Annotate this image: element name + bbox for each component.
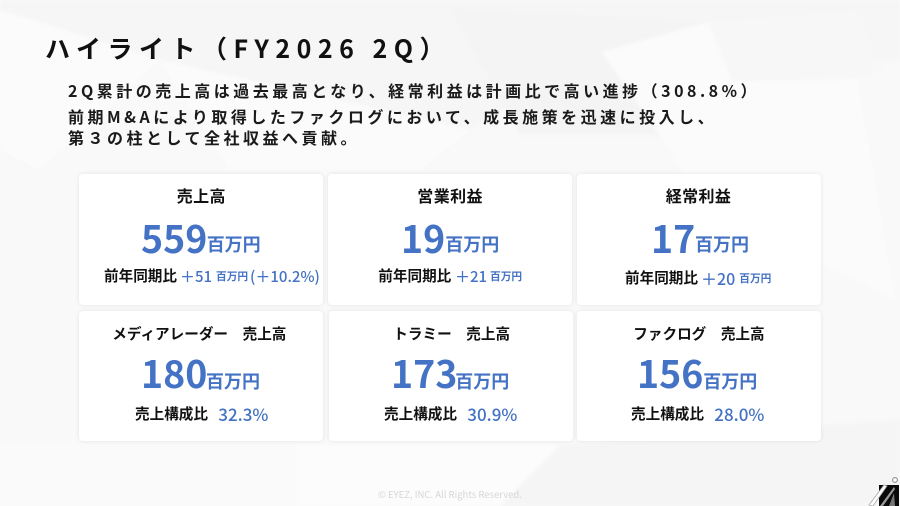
comparison value: ＋51 bbox=[180, 266, 212, 287]
comparison unit: 百万円 bbox=[216, 269, 248, 284]
panel: 経常利益 bbox=[577, 174, 821, 305]
share value: 28.0% bbox=[714, 401, 764, 426]
share label: 売上構成比 bbox=[384, 403, 457, 424]
comparison unit: 百万円 bbox=[490, 269, 522, 284]
icon: logo bbox=[868, 477, 899, 506]
card heading: 経常利益 bbox=[666, 183, 731, 207]
unit: 百万円 bbox=[445, 231, 499, 257]
comparison value: ＋20 bbox=[701, 266, 735, 290]
summary line 1: 2Q累計の売上高は過去最高となり、経常利益は計画比で高い進捗（308.8%） bbox=[68, 78, 760, 102]
summary line 2: 前期M&Aにより取得したファクログにおいて、成長施策を迅速に投入し、 bbox=[68, 104, 717, 128]
comparison label: 前年同期比 bbox=[378, 265, 451, 286]
unit: 百万円 bbox=[455, 368, 509, 394]
card heading: 売上高 bbox=[177, 183, 226, 207]
share value: 32.3% bbox=[218, 401, 268, 426]
unit: 百万円 bbox=[206, 368, 260, 394]
panel: 売上高 bbox=[79, 174, 323, 305]
panel: ファクログ 売上高 bbox=[577, 311, 821, 441]
comparison label: 前年同期比 bbox=[104, 265, 177, 286]
big number: 559 bbox=[141, 209, 207, 264]
big number: 156 bbox=[637, 344, 703, 399]
share value: 30.9% bbox=[467, 401, 517, 426]
unit: 百万円 bbox=[695, 231, 749, 257]
big number: 17 bbox=[651, 209, 695, 264]
title: ハイライト（FY2026 2Q） bbox=[45, 30, 451, 66]
big number: 19 bbox=[401, 209, 445, 264]
share label: 売上構成比 bbox=[631, 403, 704, 424]
footer copyright: © EYEZ, INC. All Rights Reserved. bbox=[378, 487, 522, 501]
card heading: ファクログ 売上高 bbox=[633, 323, 765, 344]
panel: トラミー 売上高 bbox=[329, 311, 573, 441]
big number: 173 bbox=[391, 344, 457, 399]
comparison label: 前年同期比 bbox=[625, 267, 698, 288]
panel: 営業利益 bbox=[328, 174, 572, 305]
comparison unit: 百万円 bbox=[739, 271, 771, 286]
card heading: 営業利益 bbox=[417, 183, 483, 207]
card heading: メディアレーダー 売上高 bbox=[112, 323, 286, 344]
panel: メディアレーダー 売上高 bbox=[79, 311, 323, 441]
text block: summary bbox=[68, 78, 760, 149]
summary line 3: 第３の柱として全社収益へ貢献。 bbox=[68, 125, 360, 149]
unit: 百万円 bbox=[703, 368, 757, 394]
big number: 180 bbox=[141, 344, 207, 399]
unit: 百万円 bbox=[207, 231, 261, 257]
comparison percent: (＋10.2%) bbox=[250, 266, 320, 287]
share label: 売上構成比 bbox=[135, 403, 208, 424]
comparison value: ＋21 bbox=[455, 266, 487, 287]
card heading: トラミー 売上高 bbox=[393, 323, 510, 344]
